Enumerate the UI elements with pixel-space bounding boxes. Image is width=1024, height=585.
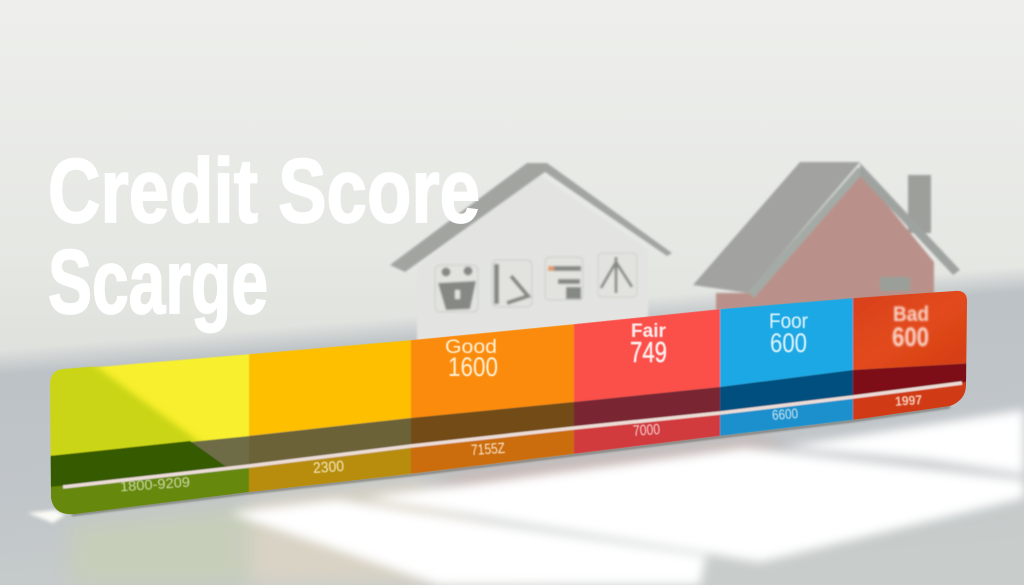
label: Fair 749 xyxy=(630,321,667,369)
icon: document form xyxy=(545,257,583,300)
label: Good 1600 xyxy=(445,337,498,382)
house body xyxy=(716,174,934,310)
label: Bad 600 xyxy=(892,303,929,352)
segment 5: blue xyxy=(720,298,853,436)
label: Fair 749: 749 xyxy=(630,337,667,369)
segment 4: coral red xyxy=(574,309,720,454)
segment 1: yellow-green xyxy=(40,354,250,520)
lime shadow wedge xyxy=(50,366,202,456)
house roof xyxy=(390,163,672,272)
label: Good 1600: Good xyxy=(445,337,497,358)
bar reflection on floor xyxy=(70,440,790,585)
window xyxy=(880,277,910,291)
label: Fair 749: Fair xyxy=(631,321,667,342)
label: Bad 600: 600 xyxy=(892,322,929,352)
title xyxy=(48,141,480,333)
label: Foor 600 xyxy=(769,310,808,358)
house: grey with icons xyxy=(390,163,672,345)
scale value labels: 7000 xyxy=(632,421,661,440)
chimney xyxy=(908,175,931,233)
segment 3: orange xyxy=(411,324,574,474)
scale value labels xyxy=(120,392,923,494)
scale value labels: 1800-9209 xyxy=(120,474,191,494)
label: Foor 600: Foor xyxy=(769,310,808,333)
house wall xyxy=(417,172,648,345)
roof ridge xyxy=(748,167,864,298)
scale value labels: 6600 xyxy=(771,405,799,423)
title: Credit Score xyxy=(48,141,480,242)
house: red xyxy=(693,162,960,310)
credit score bar xyxy=(40,288,975,520)
title: Scarge xyxy=(48,232,268,333)
segment 2: amber xyxy=(249,340,411,494)
icon: tools xyxy=(492,260,532,307)
glint at bar corner xyxy=(28,510,65,523)
scale value labels: 7155Z xyxy=(470,440,506,459)
sunlight patches on floor xyxy=(230,410,1024,585)
bar segments xyxy=(40,288,975,520)
label: Foor 600: 600 xyxy=(770,328,807,358)
segment 6: red-orange xyxy=(853,288,975,420)
scale value labels: 1997 xyxy=(895,392,923,409)
icon: tripod xyxy=(598,253,637,297)
label: Bad 600: Bad xyxy=(893,303,929,326)
icon: people with padlock basket xyxy=(435,265,478,312)
scale line xyxy=(63,383,962,487)
bar shadow edge xyxy=(72,407,950,515)
label: Good 1600: 1600 xyxy=(448,352,498,382)
right roof xyxy=(860,163,960,275)
scale value labels: 2300 xyxy=(312,458,345,477)
main roof xyxy=(693,162,860,293)
